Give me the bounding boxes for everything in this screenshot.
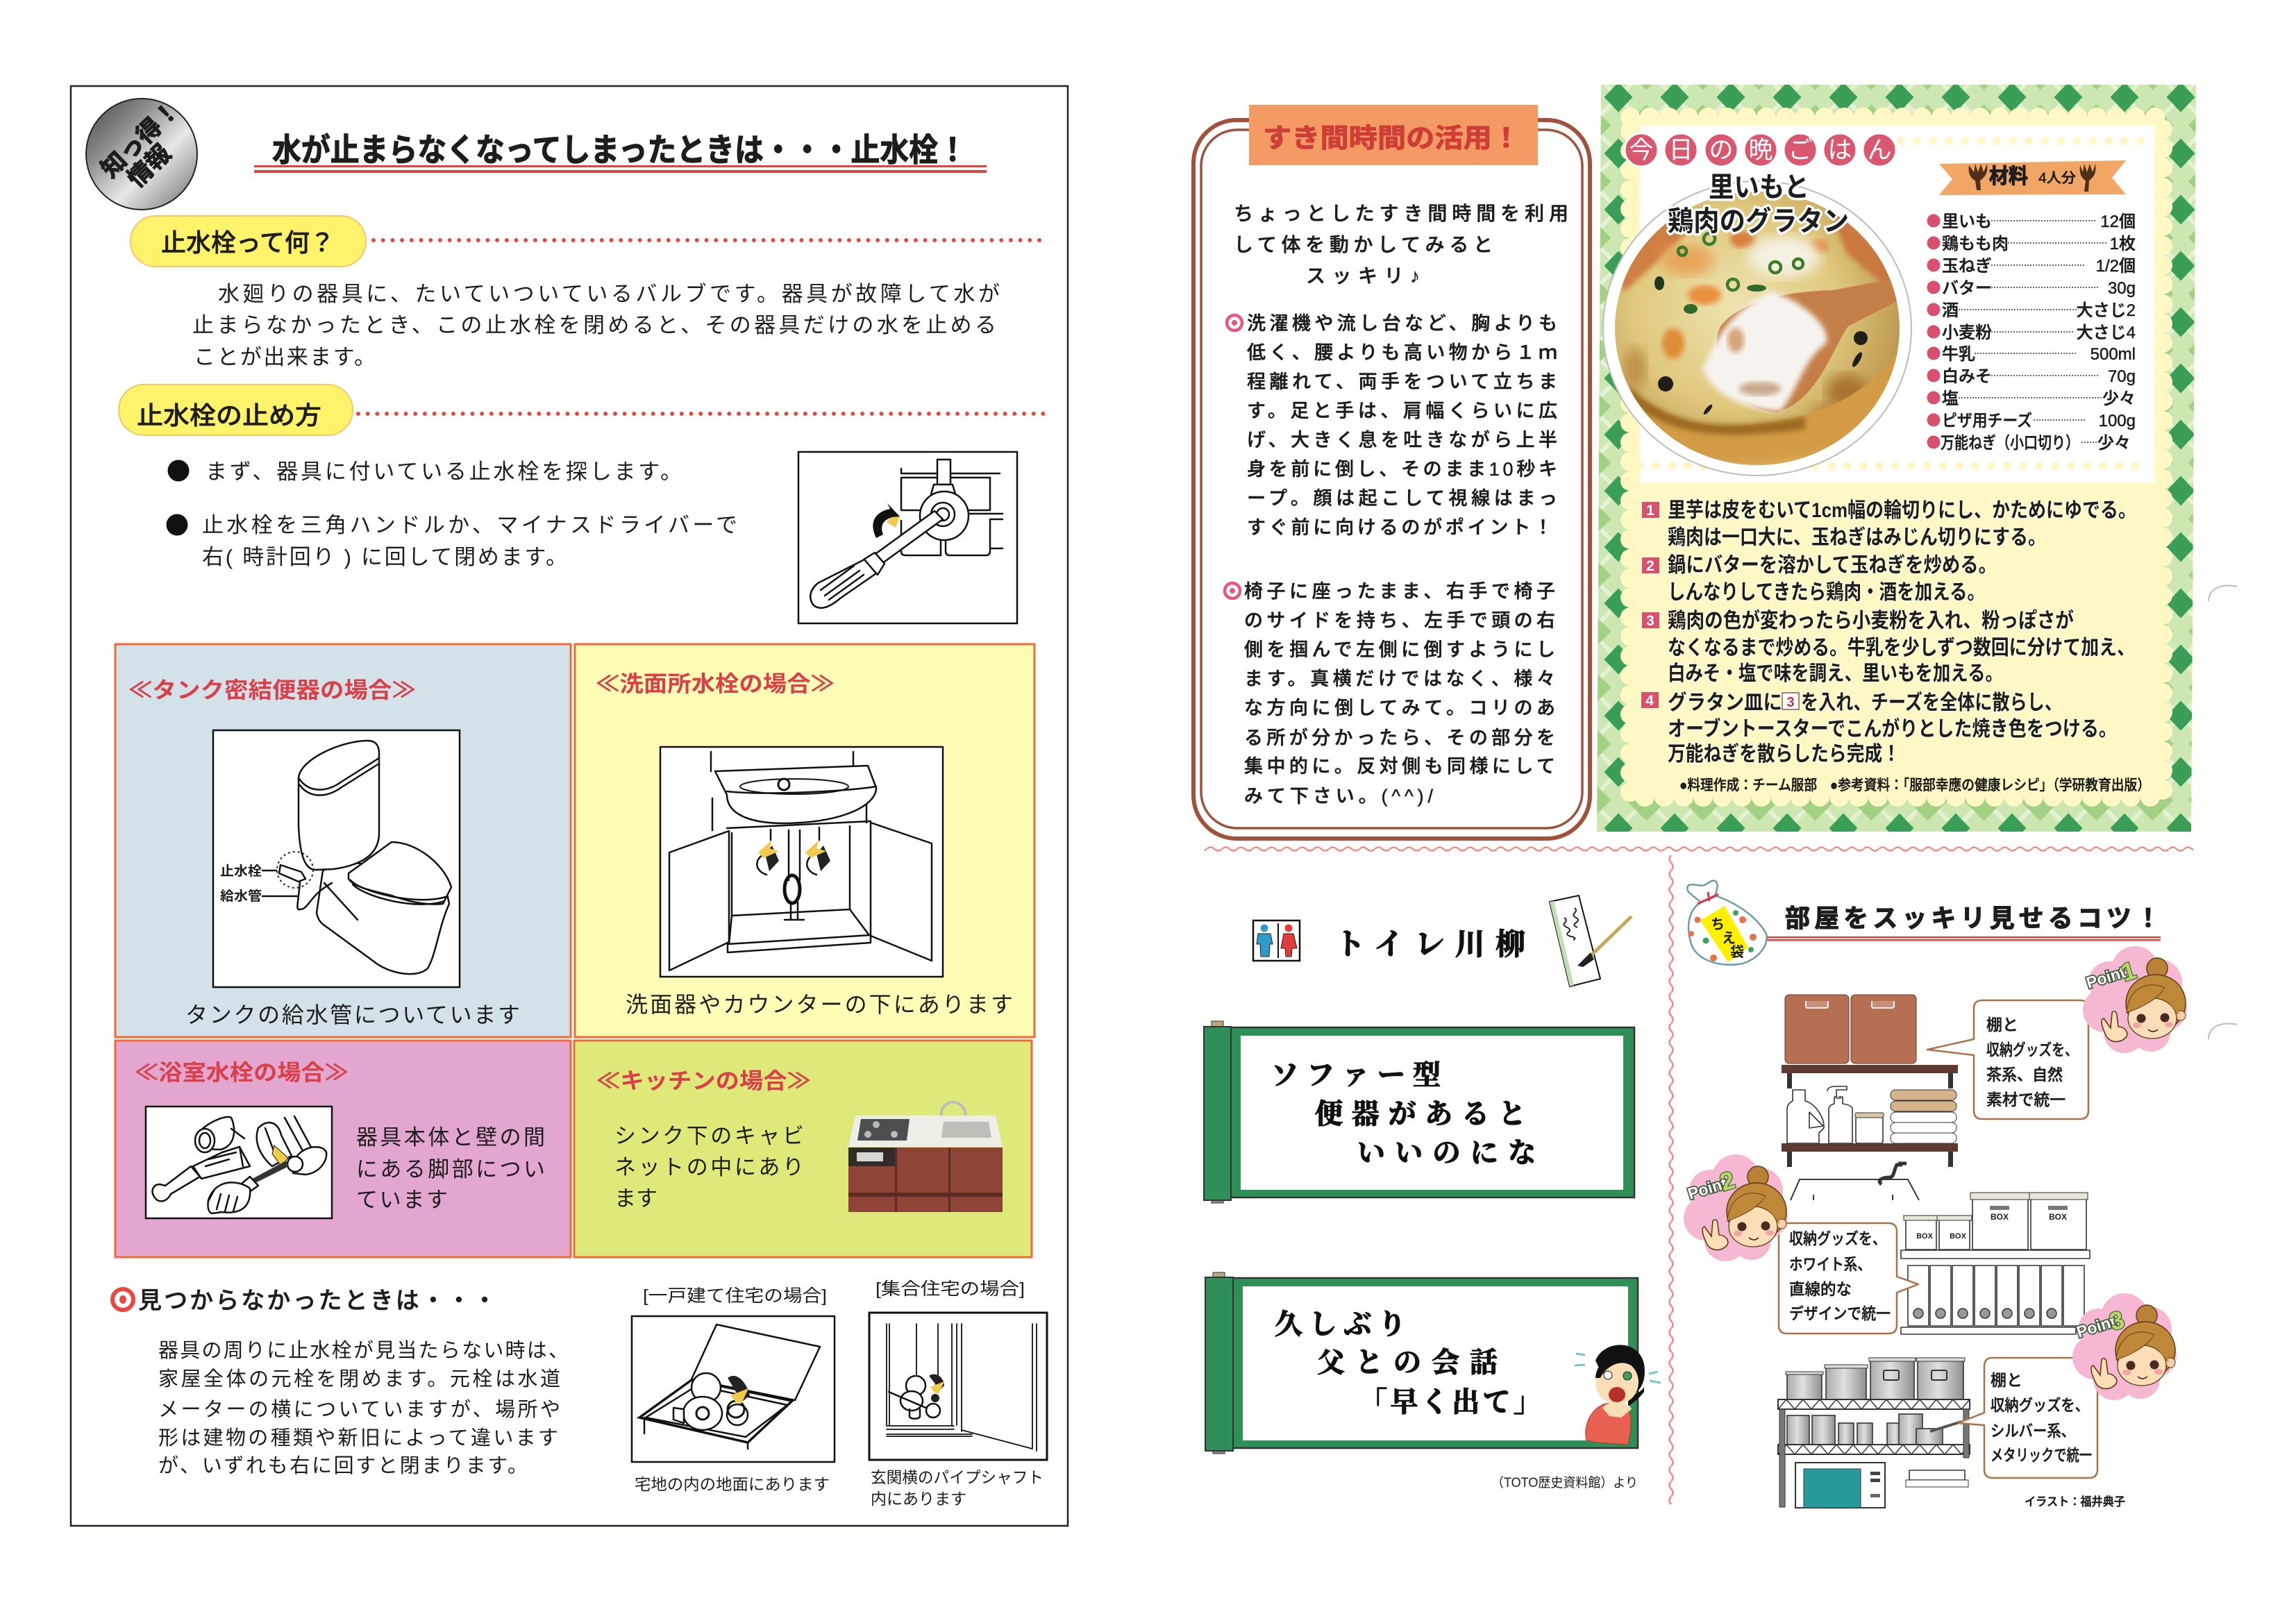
tip 2 bbox=[1225, 581, 1555, 807]
illustration: white box shelf: BOX bbox=[1916, 1232, 1934, 1241]
badge: 知っ得情報 bbox=[86, 96, 197, 210]
ingredients list: 小麦粉 bbox=[1942, 323, 1992, 342]
food title: 里いもと bbox=[1709, 172, 1809, 203]
tip 2: ます。真横だけではなく、様々 bbox=[1244, 668, 1555, 689]
caption: 宅地の内の地面にあります bbox=[635, 1475, 830, 1493]
recipe steps: しんなりしてきたら鶏肉・酒を加える。 bbox=[1668, 581, 1985, 604]
panel: 洗面所水栓の場合 bbox=[575, 644, 1034, 1037]
ingredients list: 少々 bbox=[2102, 389, 2136, 408]
panel: 今日の晩ごはん bbox=[1597, 85, 2196, 832]
text block: 器具本体と壁の間 bbox=[356, 1125, 545, 1150]
text block: 手順 bbox=[167, 460, 737, 569]
text block: ています bbox=[356, 1188, 448, 1212]
ingredients list bbox=[1927, 212, 2136, 453]
text block: 止水栓の説明: ことが出来ます。 bbox=[194, 345, 376, 369]
character: Point 1 bbox=[2083, 946, 2187, 1053]
tip 1: 程離れて、両手をついて立ちま bbox=[1247, 371, 1557, 392]
ribbon: 材料: 4人分 bbox=[2038, 170, 2076, 186]
callout: ホワイト系: 直線的な bbox=[1789, 1280, 1852, 1298]
verse: 父との会話 bbox=[1317, 1347, 1498, 1378]
figure: 一戸建て住宅の場合 bbox=[632, 1286, 835, 1493]
icon: target bbox=[112, 1289, 133, 1310]
intro text: ちょっとしたすき間時間を利用 bbox=[1234, 203, 1568, 224]
callout: 茶系: 素材で統一 bbox=[1986, 1091, 2065, 1109]
heading: ≪洗面所水栓の場合≫ bbox=[596, 671, 835, 696]
panel: キッチンの場合 bbox=[574, 1041, 1032, 1257]
text block: 元栓の説明: 形は建物の種類や新旧によって違います bbox=[158, 1427, 558, 1449]
credit: ●料理作成：チーム服部 ●参考資料：「服部幸應の健康レシピ」（学研教育出版） bbox=[1679, 777, 2150, 793]
recipe steps: 2 bbox=[1646, 558, 1654, 574]
text block: ネットの中にあり bbox=[614, 1155, 804, 1179]
illustration: toilet bbox=[213, 730, 460, 987]
ingredients list: 1枚 bbox=[2110, 235, 2136, 253]
text block: 止水栓の説明: 水廻りの器具に、たいていついているバルブです。器具が故障して水が bbox=[218, 282, 1000, 306]
callout: シルバー系: シルバー系、 bbox=[1991, 1422, 2075, 1440]
text block bbox=[614, 1124, 804, 1211]
figure: 集合住宅の場合: 内にあります bbox=[871, 1490, 966, 1508]
text block: 手順: 止水栓を三角ハンドルか、マイナスドライバーで bbox=[202, 513, 737, 537]
ingredients list: 塩 bbox=[1942, 389, 1959, 408]
illustration: worried woman bbox=[1575, 1345, 1661, 1445]
character: Point 2 bbox=[1684, 1154, 1788, 1261]
heading: 今日の晩ごはん: ん bbox=[1867, 137, 1892, 164]
recipe steps bbox=[1641, 499, 2150, 793]
icon: tanzaku and brush bbox=[1550, 895, 1632, 986]
ingredients list: バター bbox=[1942, 279, 1992, 298]
illustration: kitchen counter bbox=[848, 1102, 1003, 1212]
tip 1: すぐ前に向けるのがポイント！ bbox=[1247, 517, 1552, 538]
callout: シルバー系: 棚と bbox=[1991, 1371, 2022, 1389]
heading: 止水栓って何？: 止水栓って何？ bbox=[161, 228, 335, 257]
verse bbox=[1275, 1309, 1541, 1418]
tip 2: な方向に倒してみて。コリのあ bbox=[1244, 698, 1555, 718]
recipe steps: グラタン皿に bbox=[1668, 691, 1782, 714]
callout: 茶系: 棚と bbox=[1986, 1016, 2018, 1034]
text block: 手順: 右( 時計回り ) に回して閉めます。 bbox=[202, 545, 567, 569]
icon: ちえ袋: ち bbox=[1711, 916, 1725, 932]
photo: gratin bbox=[1603, 181, 1911, 479]
ingredients list: 1/2個 bbox=[2096, 257, 2136, 276]
heading: 今日の晩ごはん: ご bbox=[1788, 137, 1813, 164]
tip 1: 身を前に倒し、そのまま10秒キ bbox=[1247, 459, 1557, 480]
text block: 元栓の説明: が、いずれも右に回すと閉まります。 bbox=[158, 1454, 528, 1477]
illustration: white box shelf: BOX bbox=[1991, 1212, 2009, 1222]
ingredients list: 里いも bbox=[1942, 212, 1992, 231]
recipe steps: 白みそ・塩で味を調え、里いもを加える。 bbox=[1668, 662, 2003, 685]
intro text: して体を動かしてみると bbox=[1234, 234, 1493, 255]
caption: 玄関横のパイプシャフト bbox=[871, 1468, 1044, 1486]
ingredients list: 大さじ2 bbox=[2077, 301, 2136, 320]
ingredients list: 12個 bbox=[2100, 212, 2136, 231]
text block: にある脚部につい bbox=[356, 1157, 545, 1181]
callout: シルバー系: メタリックで統一 bbox=[1991, 1446, 2092, 1464]
recipe steps: 3 bbox=[1646, 613, 1654, 629]
illustration: white box shelf: BOX bbox=[1950, 1232, 1967, 1241]
verse: 久しぶり bbox=[1275, 1309, 1406, 1340]
character: Point 2: Point bbox=[1686, 1174, 1729, 1203]
character: Point 3: 3 bbox=[2106, 1305, 2127, 1336]
scroll: 川柳1 bbox=[1204, 1021, 1634, 1203]
ingredients list: 70g bbox=[2108, 367, 2136, 386]
tip 1 bbox=[1227, 313, 1557, 538]
heading: [一戸建て住宅の場合] bbox=[643, 1286, 827, 1306]
illustration: bath faucet bbox=[146, 1107, 332, 1218]
recipe steps: 3 bbox=[1786, 695, 1795, 710]
ribbon: 材料 bbox=[1939, 160, 2126, 195]
tip 2: 椅子に座ったまま、右手で椅子 bbox=[1244, 581, 1555, 602]
illustration: metal rack bbox=[1778, 1358, 1970, 1508]
badge: 知っ得情報: 知っ得！ bbox=[96, 96, 185, 183]
panel: すき間時間の活用 bbox=[1193, 105, 1590, 839]
tip 2: る所が分かったら、その部分を bbox=[1244, 728, 1555, 748]
caption: 洗面器やカウンターの下にあります bbox=[626, 992, 1013, 1017]
callout: ホワイト系: ホワイト系、 bbox=[1789, 1255, 1871, 1273]
text block: 止水栓の説明 bbox=[192, 282, 1000, 369]
ingredients list: 酒 bbox=[1942, 301, 1959, 320]
callout: ホワイト系: 収納グッズを、 bbox=[1789, 1229, 1886, 1247]
icon: ちえ袋: え bbox=[1722, 930, 1736, 946]
heading: 今日の晩ごはん: の bbox=[1709, 137, 1734, 164]
recipe steps: オーブントースターでこんがりとした焼き色をつける。 bbox=[1668, 717, 2117, 741]
heading: 今日の晩ごはん: 晩 bbox=[1748, 137, 1773, 164]
heading: 今日の晩ごはん: 今 bbox=[1629, 137, 1654, 164]
illustration: toilet: 給水管 bbox=[220, 888, 262, 904]
text block: 元栓の説明: 家屋全体の元栓を閉めます。元栓は水道 bbox=[158, 1368, 560, 1390]
text block: ます bbox=[614, 1186, 657, 1211]
callout: 茶系 bbox=[1927, 1000, 2088, 1119]
credit: TOTO: （TOTO歴史資料館）より bbox=[1491, 1475, 1638, 1490]
recipe steps: 鶏肉の色が変わったら小麦粉を入れ、粉っぽさが bbox=[1668, 609, 2074, 632]
recipe steps: 1 bbox=[1646, 503, 1654, 519]
character: Point 2: 2 bbox=[1716, 1166, 1738, 1197]
figure: 集合住宅の場合 bbox=[869, 1279, 1047, 1508]
character: Point 1: Point bbox=[2084, 963, 2128, 992]
food title bbox=[1668, 172, 1849, 237]
tip 2: みて下さい。(^^)/ bbox=[1244, 786, 1433, 807]
heading: トイレ川柳: トイレ川柳 bbox=[1335, 929, 1525, 961]
verse: 「早く出て」 bbox=[1359, 1386, 1541, 1418]
heading ribbon: すき間時間の活用！ bbox=[1263, 124, 1520, 153]
verse: 便器があると bbox=[1315, 1098, 1526, 1129]
ingredients list: 30g bbox=[2108, 279, 2136, 298]
heading: ≪キッチンの場合≫ bbox=[596, 1068, 811, 1093]
tip 1: 低く、腰よりも高い物から１ｍ bbox=[1247, 342, 1557, 363]
tip 1: げ、大きく息を吐きながら上半 bbox=[1247, 430, 1557, 451]
tip 1: ープ。顔は起こして視線はまっ bbox=[1247, 488, 1557, 509]
heading: [集合住宅の場合] bbox=[875, 1279, 1025, 1299]
panel: タンク密結便器の場合 bbox=[115, 644, 571, 1037]
ingredients list: 500ml bbox=[2090, 345, 2136, 364]
verse: いいのにな bbox=[1357, 1137, 1536, 1168]
illustration: white box shelf: BOX bbox=[2049, 1212, 2067, 1222]
recipe steps: 里芋は皮をむいて1cm幅の輪切りにし、かためにゆでる。 bbox=[1668, 499, 2136, 522]
verse bbox=[1271, 1059, 1536, 1168]
callout: シルバー系 bbox=[1958, 1358, 2097, 1478]
ingredients list: 少々 bbox=[2097, 434, 2131, 453]
illustration: white box shelf bbox=[1901, 1193, 2090, 1334]
ingredients list: 牛乳 bbox=[1942, 345, 1975, 364]
recipe steps: なくなるまで炒める。牛乳を少しずつ数回に分けて加え、 bbox=[1668, 637, 2135, 659]
heading: 今日の晩ごはん: 日 bbox=[1668, 137, 1693, 164]
text block: 止水栓の説明: 止まらなかったとき、この止水栓を閉めると、その器具だけの水を止める bbox=[192, 313, 996, 337]
recipe steps: 万能ねぎを散らしたら完成！ bbox=[1668, 743, 1900, 766]
icon: ちえ袋: 袋 bbox=[1730, 944, 1744, 960]
ingredients list: 大さじ4 bbox=[2077, 323, 2136, 342]
ribbon: 材料: 材料 bbox=[1989, 165, 2028, 188]
scroll: 川柳2 bbox=[1205, 1272, 1638, 1454]
intro text: スッキリ♪ bbox=[1306, 265, 1420, 287]
panel: left page frame bbox=[71, 86, 1068, 1526]
text block: 手順: まず、器具に付いている止水栓を探します。 bbox=[206, 460, 682, 484]
text block: 元栓の説明: メーターの横についていますが、場所や bbox=[158, 1398, 560, 1421]
heading: 止水栓の止め方 bbox=[119, 385, 1044, 435]
tip 1: す。足と手は、肩幅くらいに広 bbox=[1247, 401, 1557, 421]
ingredients list: ピザ用チーズ bbox=[1942, 412, 2032, 430]
character: Point 1: 1 bbox=[2118, 956, 2139, 987]
food title: 鶏肉のグラタン bbox=[1668, 206, 1849, 237]
callout: ホワイト系 bbox=[1779, 1223, 1918, 1334]
callout: ホワイト系: デザインで統一 bbox=[1789, 1304, 1891, 1322]
heading: 見つからなかったときは: 見つからなかったときは・・・ bbox=[138, 1288, 496, 1314]
heading: ≪浴室水栓の場合≫ bbox=[135, 1060, 349, 1085]
callout: シルバー系: 収納グッズを、 bbox=[1991, 1396, 2089, 1414]
ingredients list: 鶏もも肉 bbox=[1942, 235, 2009, 253]
heading: 止水栓の止め方: 止水栓の止め方 bbox=[137, 401, 321, 430]
recipe steps: 鍋にバターを溶かして玉ねぎを炒める。 bbox=[1668, 554, 1997, 577]
heading: 今日の晩ごはん bbox=[1625, 133, 1896, 167]
ingredients list: 万能ねぎ（小口切り） bbox=[1941, 434, 2079, 453]
heading: 今日の晩ごはん: は bbox=[1827, 137, 1852, 164]
intro text bbox=[1234, 203, 1568, 287]
verse: ソファー型 bbox=[1271, 1059, 1441, 1091]
heading: 止水栓って何？ bbox=[131, 216, 1046, 267]
tip 2: 集中的に。反対側も同様にして bbox=[1244, 756, 1555, 777]
illustration: screwdriver bbox=[798, 452, 1017, 623]
text block bbox=[356, 1125, 545, 1212]
caption: タンクの給水管についています bbox=[185, 1002, 520, 1027]
heading: 部屋をスッキリ見せるコツ: 部屋をスッキリ見せるコツ！ bbox=[1785, 904, 2161, 932]
panel: 浴室水栓の場合 bbox=[115, 1041, 571, 1257]
recipe steps: 4 bbox=[1645, 693, 1654, 709]
character: Point 3 bbox=[2072, 1293, 2177, 1400]
tip 2: のサイドを持ち、左手で頭の右 bbox=[1244, 610, 1555, 631]
credit: illustrator: イラスト：福井典子 bbox=[2025, 1495, 2125, 1508]
illustration: toilet: 止水栓 bbox=[220, 864, 262, 879]
ingredients list: 100g bbox=[2099, 412, 2136, 430]
callout: 茶系: 茶系、自然 bbox=[1986, 1066, 2063, 1084]
recipe steps: 鶏肉は一口大に、玉ねぎはみじん切りにする。 bbox=[1668, 526, 2046, 549]
illustration: brown shelf bbox=[1782, 995, 1958, 1200]
heading ribbon bbox=[1249, 105, 1538, 165]
tip 1: 洗濯機や流し台など、胸よりも bbox=[1247, 313, 1557, 334]
text block: 元栓の説明 bbox=[158, 1339, 569, 1477]
illustration: washbasin cabinet bbox=[660, 747, 943, 977]
callout: 茶系: 収納グッズを、 bbox=[1986, 1041, 2078, 1059]
ingredients list: 白みそ bbox=[1942, 367, 1992, 386]
recipe steps: を入れ、チーズを全体に散らし、 bbox=[1801, 691, 2062, 714]
text block: 元栓の説明: 器具の周りに止水栓が見当たらない時は、 bbox=[158, 1339, 569, 1362]
text block: シンク下のキャビ bbox=[614, 1124, 804, 1148]
title: 水が止まらなくなってしまったときは・・・止水栓！ bbox=[272, 132, 967, 168]
badge: 知っ得情報: 情報 bbox=[122, 140, 176, 193]
heading: ≪タンク密結便器の場合≫ bbox=[128, 678, 416, 703]
character: Point 3: Point bbox=[2075, 1312, 2118, 1341]
tip 2: 側を掴んで左側に倒すようにし bbox=[1244, 639, 1555, 660]
icon: toilet sign bbox=[1253, 920, 1300, 961]
icon: ちえ袋 bbox=[1687, 881, 1767, 965]
ingredients list: 玉ねぎ bbox=[1942, 257, 1992, 276]
